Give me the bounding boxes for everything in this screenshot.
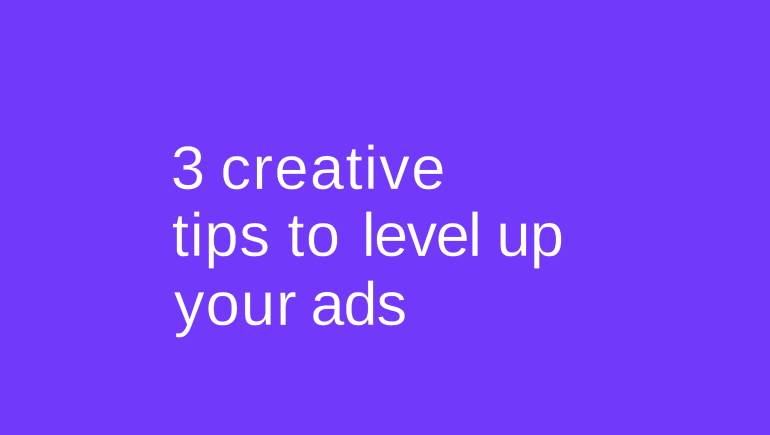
title: your: [174, 270, 298, 338]
title: up: [496, 201, 564, 269]
title: ads: [310, 270, 406, 338]
title: 3: [171, 134, 205, 202]
title: level: [362, 201, 480, 269]
title: to: [288, 201, 341, 269]
title: creative: [220, 134, 447, 202]
title: tips: [172, 201, 271, 269]
